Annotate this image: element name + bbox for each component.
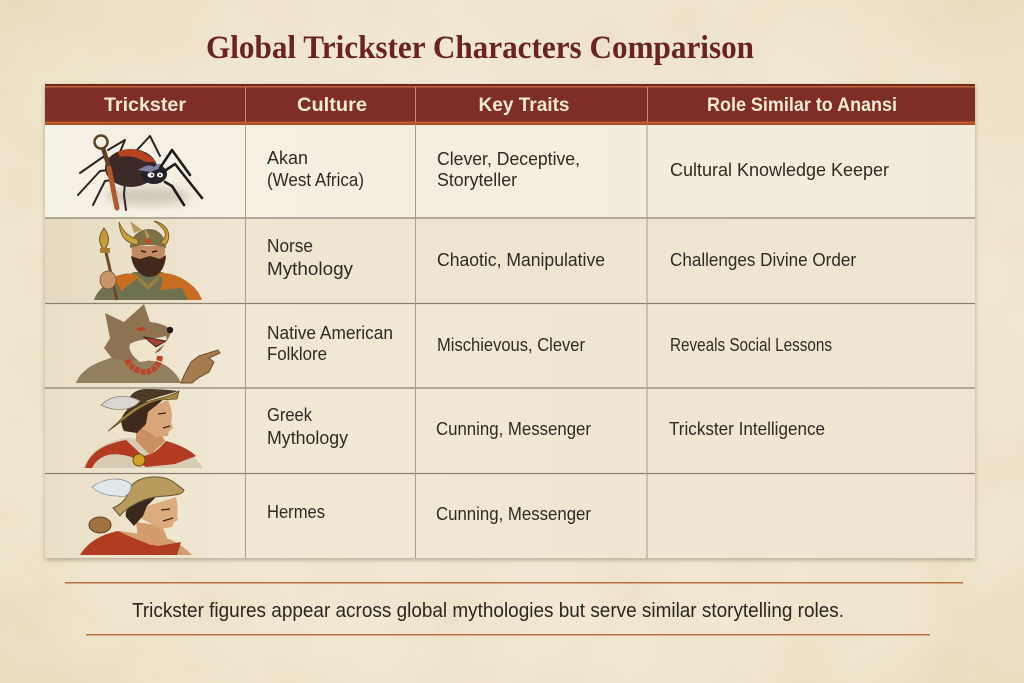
row 2 text: Mythology bbox=[267, 259, 353, 279]
footer note: Trickster figures appear across global mythologies but serve similar storytelling roles. bbox=[132, 600, 844, 622]
header labels: Culture bbox=[297, 95, 367, 116]
icon: spider bbox=[78, 136, 202, 210]
row 2 text bbox=[267, 236, 856, 279]
header labels: Trickster bbox=[104, 95, 187, 116]
icon: Hermes with wing hat bbox=[83, 389, 203, 468]
row 5 text bbox=[267, 502, 591, 524]
title: Global Trickster Characters Comparison bbox=[206, 30, 754, 66]
row 2 text: Chaotic, Manipulative bbox=[437, 250, 605, 270]
panel: comparison table bbox=[45, 84, 975, 558]
footer rule bottom bbox=[86, 634, 930, 636]
row 4 text: Greek bbox=[267, 405, 313, 425]
row 3 text: Native American bbox=[267, 323, 393, 343]
row 5 text: Cunning, Messenger bbox=[436, 504, 591, 524]
row 4 text: Cunning, Messenger bbox=[436, 419, 591, 439]
row 3 text bbox=[267, 323, 832, 364]
row backgrounds bbox=[45, 124, 975, 558]
header row bbox=[45, 84, 975, 125]
header labels: Role Similar to Anansi bbox=[707, 95, 897, 116]
footer rule top bbox=[65, 582, 963, 584]
row 1 text: Storyteller bbox=[437, 170, 517, 190]
row 1 text: Akan bbox=[267, 148, 308, 168]
row 1 text: Clever, Deceptive, bbox=[437, 149, 580, 169]
row 4 text: Mythology bbox=[267, 428, 348, 448]
header labels: Key Traits bbox=[478, 95, 570, 116]
row 2 text: Challenges Divine Order bbox=[670, 250, 856, 270]
row 3 text: Folklore bbox=[267, 344, 327, 364]
row 1 text: Cultural Knowledge Keeper bbox=[670, 160, 889, 180]
row 4 text bbox=[267, 405, 825, 448]
grid lines bbox=[45, 124, 975, 558]
row 5 text: Hermes bbox=[267, 502, 325, 522]
icon: coyote bbox=[76, 304, 220, 383]
row 3 text: Reveals Social Lessons bbox=[670, 335, 832, 355]
row 1 text bbox=[267, 148, 889, 190]
row 1 text: (West Africa) bbox=[267, 170, 364, 190]
header labels bbox=[104, 95, 897, 116]
icon: Hermes second portrait bbox=[80, 477, 192, 555]
icon: Loki bbox=[94, 221, 202, 300]
row 2 text: Norse bbox=[267, 236, 313, 256]
row 4 text: Trickster Intelligence bbox=[669, 419, 825, 439]
row 3 text: Mischievous, Clever bbox=[437, 335, 585, 355]
